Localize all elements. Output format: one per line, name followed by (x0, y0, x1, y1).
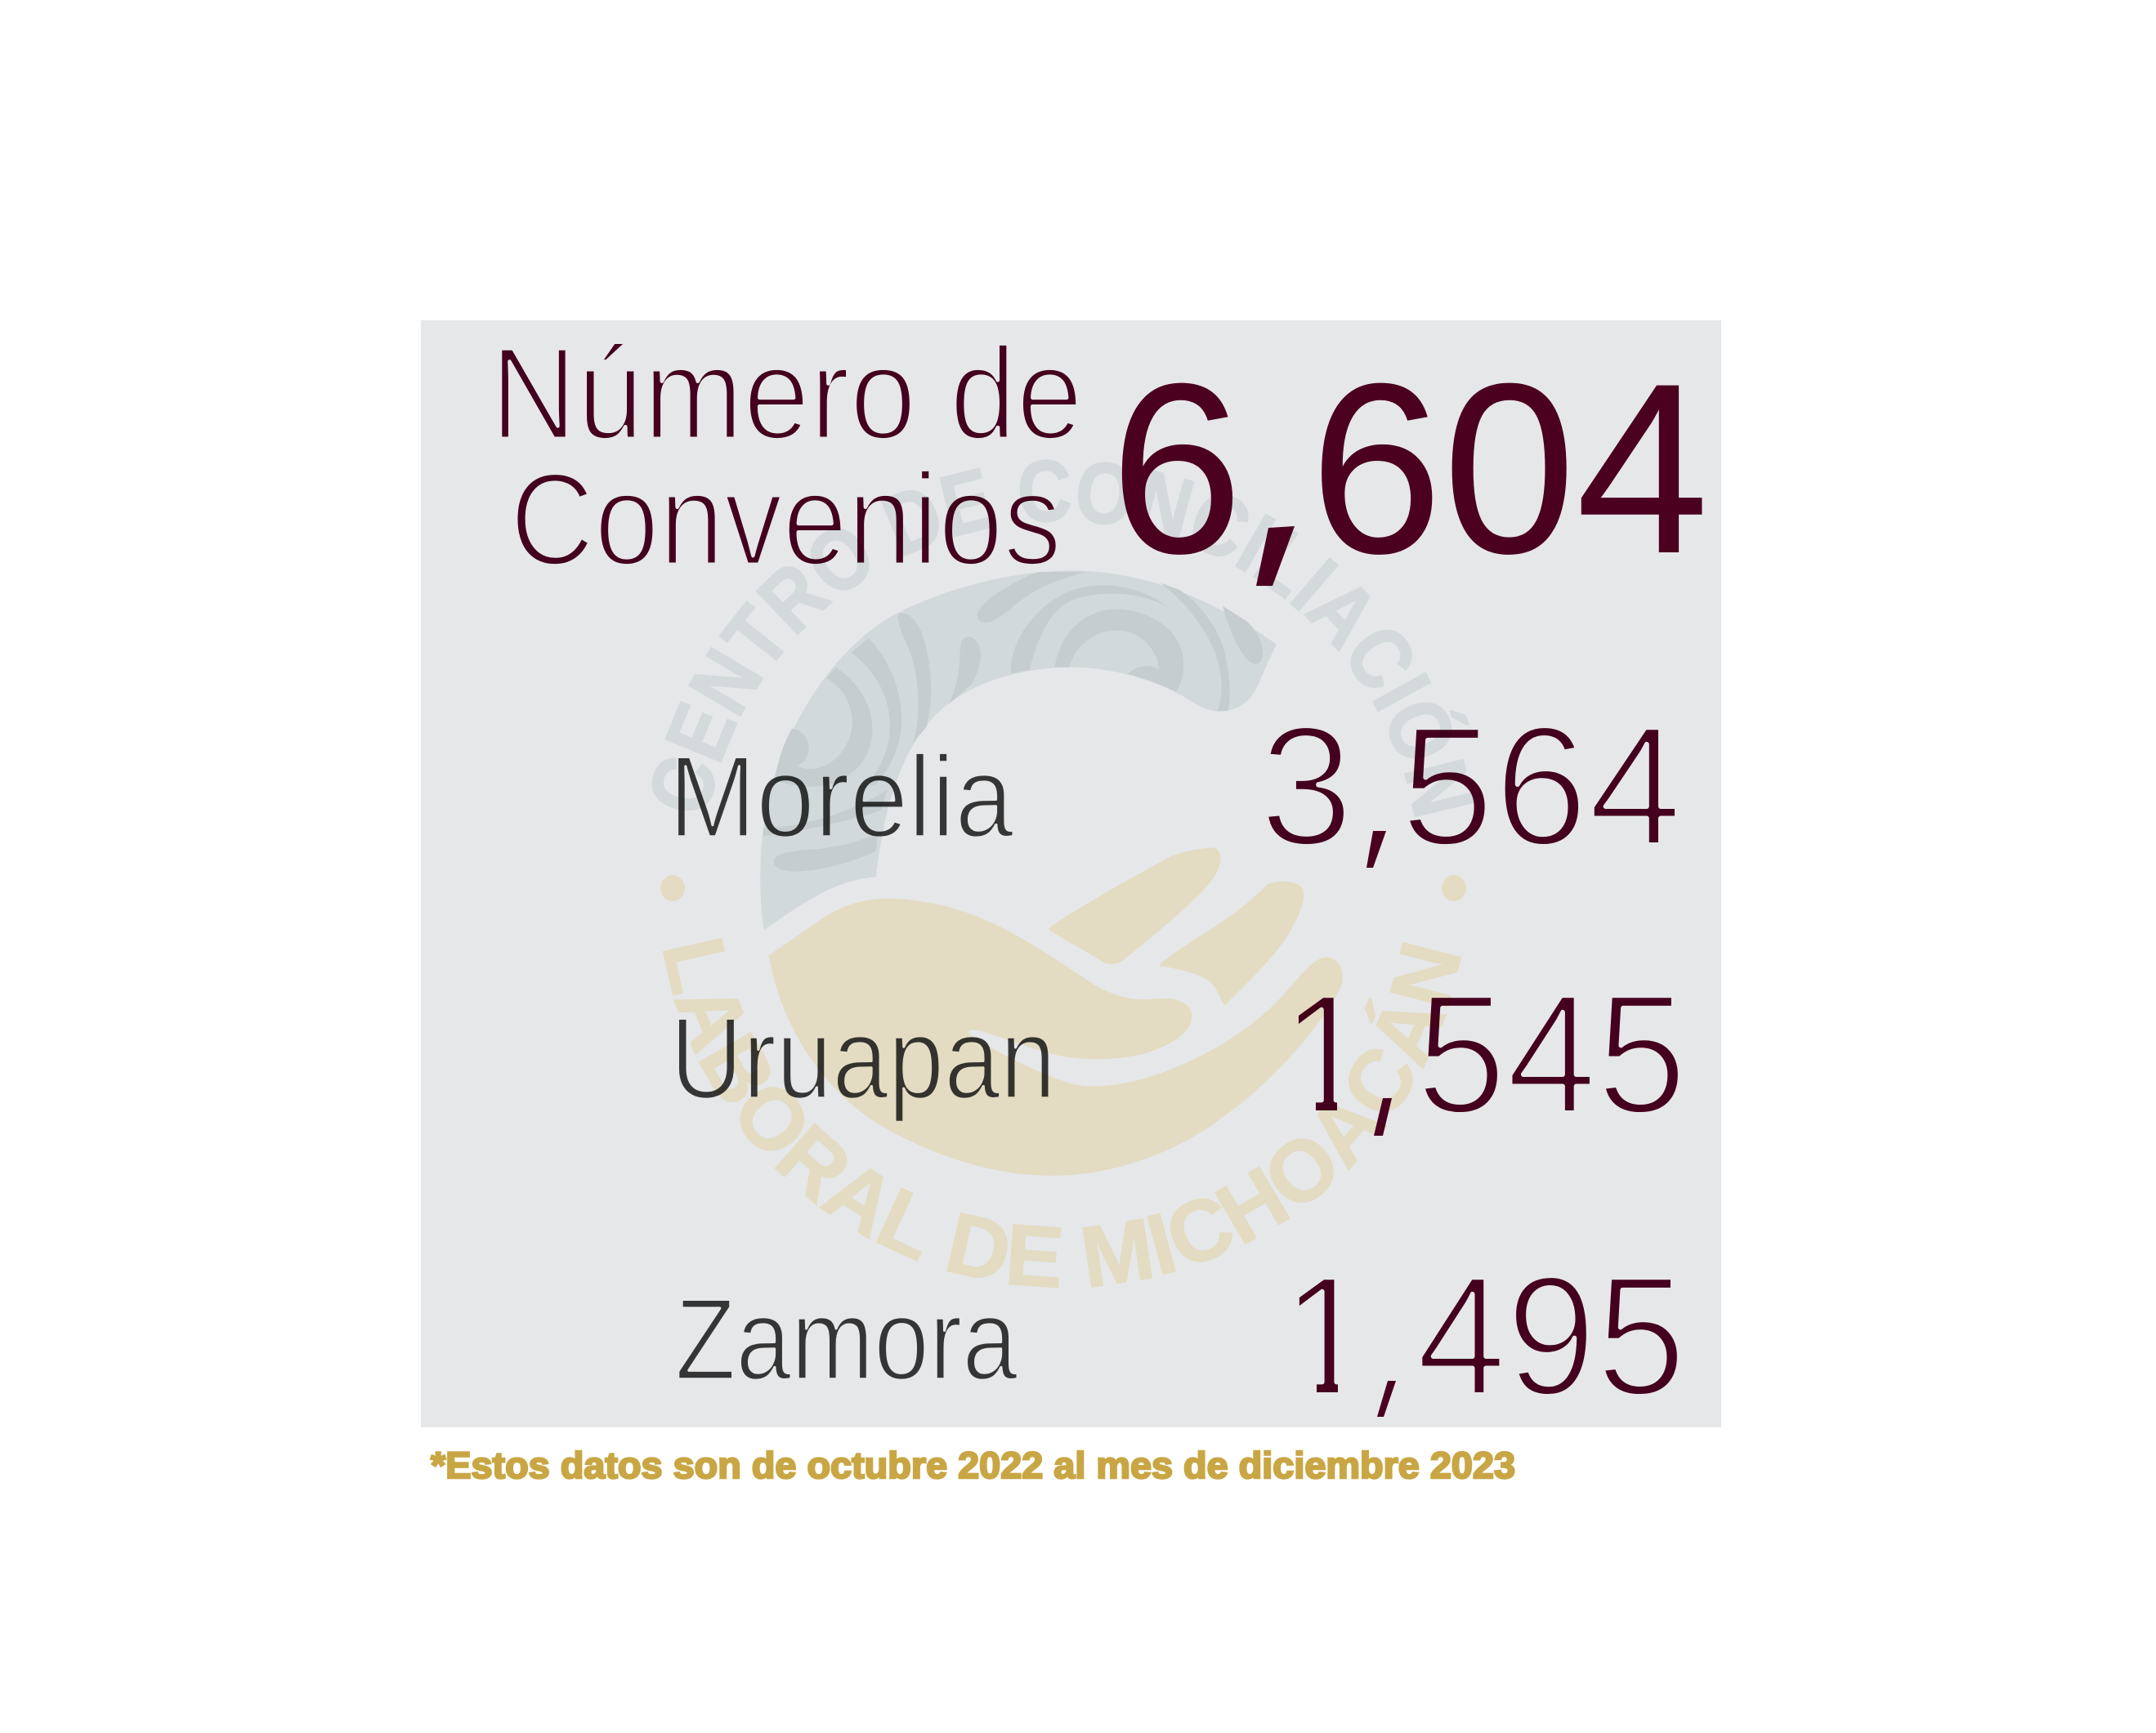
row value: 1,545: 1,545 (1281, 959, 1687, 1150)
row label: Uruapan: Uruapan (670, 994, 1056, 1123)
row value: 1,495: 1,495 (1282, 1241, 1686, 1432)
watermark: institutional logo (652, 459, 1474, 1289)
logo: grey crescent with swirls (760, 570, 1277, 930)
watermark dot: left (660, 875, 685, 901)
panel: data card (421, 320, 1721, 1427)
row value: 1,545 (1298, 998, 1678, 1136)
total value: 6,604: 6,604 (1110, 333, 1709, 604)
heading: Número de: Número de (490, 320, 1083, 467)
logo: tan open hand (769, 847, 1343, 1176)
heading: Convenios: Convenios (510, 446, 1062, 593)
watermark arc text: bottom: LABORAL DE MICHOACÁN (662, 938, 1461, 1289)
watermark dot: right (1442, 875, 1466, 901)
row value: 3,564 (1268, 728, 1675, 868)
row value: 1,495 (1299, 1278, 1677, 1417)
row value: 3,564: 3,564 (1259, 691, 1682, 882)
watermark arc text: top: CENTRO DE CONCILIACIÓN (652, 459, 1474, 817)
row label: Morelia: Morelia (669, 732, 1013, 862)
row label: Zamora: Zamora (675, 1275, 1018, 1405)
footnote: *Estos datos son de octubre 2022 al mes de diciembre 2023 (431, 1445, 1515, 1486)
